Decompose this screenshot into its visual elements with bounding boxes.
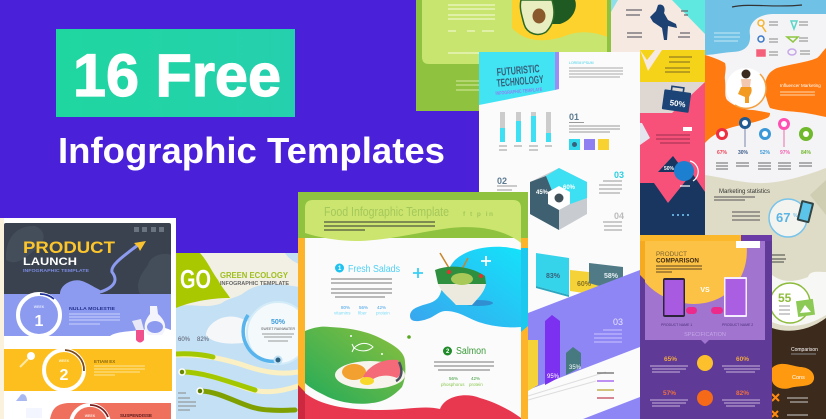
icon: salad bowl	[435, 253, 493, 306]
chart: 67% donut: %	[793, 213, 798, 219]
chart: 50% gauge	[243, 302, 309, 364]
chart: bars	[499, 112, 552, 150]
chart: isometric arrows: 35%	[569, 365, 582, 371]
panel: avocado template	[416, 0, 612, 111]
social stat pins: 84%	[801, 150, 812, 156]
navy base	[640, 173, 705, 235]
panel: product comparison template: SPECIFICATION	[684, 332, 726, 338]
heading: FUTURISTIC	[496, 63, 540, 79]
week 2 band: ETIAM EX	[94, 359, 115, 364]
title badge	[56, 29, 295, 117]
icon: flask	[145, 306, 165, 335]
header: LAUNCH	[23, 256, 77, 268]
chart: 55 donut: 55	[778, 291, 792, 305]
step 01: 01	[569, 112, 579, 122]
heading: GO	[180, 264, 211, 294]
heading	[493, 63, 545, 97]
title badge: 16 Free	[73, 42, 281, 109]
panel: futuristic technology template	[479, 52, 640, 419]
social stat pins: 67%	[717, 150, 728, 156]
section: salmon	[434, 346, 494, 387]
heading: Food Infographic Template	[324, 205, 449, 219]
icon: fish	[352, 343, 373, 352]
chart: isometric arrows: 95%	[547, 374, 560, 380]
week 1 band: 1	[35, 313, 44, 330]
subtitle: Infographic Templates	[58, 130, 445, 171]
chart: isometric boxes	[536, 253, 623, 297]
icon: vs: VS	[700, 287, 710, 294]
icon: phone left	[663, 278, 685, 317]
week 2 band: WEEK	[59, 359, 70, 363]
social stat pins: 52%	[760, 150, 771, 156]
social stat pins: 30%	[738, 150, 749, 156]
week 1 band	[4, 294, 171, 345]
section: fresh salads: 56%	[359, 305, 368, 310]
panel: product comparison template	[640, 235, 772, 419]
icon: salmon plate	[335, 360, 405, 389]
section: fresh salads: vitamins	[334, 310, 351, 316]
panel: futuristic technology template: LOREM IPSUM	[569, 61, 594, 65]
social stat pins	[716, 117, 813, 169]
chart: 67% donut	[769, 199, 814, 237]
week 3 band	[16, 394, 171, 419]
panel: green ecology template	[176, 253, 309, 419]
section: fresh salads: Fresh Salads	[348, 263, 400, 275]
icon: globe	[658, 156, 698, 186]
week 1 band: NULLA MOLESTIE	[69, 306, 115, 311]
panel: food infographic template	[298, 192, 528, 419]
panel: green ecology template: 60%	[178, 337, 191, 343]
heading: COMPARISON	[656, 258, 699, 264]
week 3 band: WEEK	[85, 414, 96, 418]
chart: wave lines	[176, 354, 298, 410]
panel: futuristic technology template: 03	[613, 317, 623, 327]
social stat pins: 97%	[780, 150, 791, 156]
section: salmon: 42%	[471, 376, 480, 381]
blue blob	[410, 247, 521, 327]
panel: green ecology template: 82%	[197, 337, 210, 343]
heading: TECHNOLOGY	[496, 74, 544, 90]
icon: woman in yoga pose	[726, 68, 766, 108]
section: salmon: 56%	[449, 376, 458, 381]
icon: magnifier	[27, 352, 35, 360]
spec stats: 57%	[663, 390, 676, 397]
heading: INFOGRAPHIC TEMPLATE	[495, 87, 543, 97]
heading	[180, 264, 289, 294]
panel: right column lower (stats and brown): Comparison	[791, 347, 818, 353]
panel: business template	[611, 0, 705, 235]
panel: product comparison template: PRODUCT NAME 1	[661, 323, 692, 327]
icon: seated businessman silhouette	[650, 5, 677, 40]
section: fresh salads: 1	[338, 266, 342, 272]
icon: avocado	[520, 0, 576, 34]
icon: laptop	[640, 123, 650, 145]
week 1 band: WEEK	[34, 305, 45, 309]
panel: product comparison template: PRODUCT NAME 2	[722, 323, 753, 327]
section: fresh salads	[331, 263, 400, 316]
chart: isometric boxes: 83%	[546, 273, 561, 280]
chart: hexagon: 45%	[536, 190, 549, 196]
chart: hexagon	[530, 168, 587, 230]
heading: PRODUCT	[656, 251, 687, 258]
icon: cons blob	[772, 364, 814, 389]
section: salmon: 2	[446, 349, 450, 355]
header: PRODUCT	[23, 239, 115, 257]
section: fresh salads: 80%	[341, 305, 350, 310]
panel: futuristic technology template: 03	[614, 170, 624, 180]
chart: 50% gauge: 50%	[271, 319, 286, 326]
panel: futuristic technology template: 02	[497, 176, 507, 186]
spec stats	[650, 355, 760, 406]
chart: isometric boxes: 60%	[577, 281, 592, 288]
section: salmon: phosphorus	[441, 382, 465, 387]
icon: plus signs	[481, 256, 491, 266]
heading: INFOGRAPHIC TEMPLATE	[220, 281, 289, 287]
chart: 55 donut	[770, 283, 815, 323]
section: salmon: Salmon	[456, 346, 486, 357]
icon: briefcase 50%	[662, 85, 692, 113]
social icons: f t p in	[463, 211, 493, 218]
icon: paper plane	[134, 241, 146, 251]
chart: 67% donut: 67	[776, 210, 790, 225]
icon: phone right	[724, 277, 747, 317]
chart: isometric arrows	[528, 315, 582, 391]
chart: 50% gauge: SWEET RAINWATER	[261, 327, 295, 331]
chart: hexagon: 60%	[563, 185, 576, 191]
icon: briefcase 50%: 50%	[669, 98, 686, 109]
chart: isometric boxes: 58%	[604, 273, 619, 280]
week 3 band: SUSPENDISSE	[120, 413, 152, 418]
section: fresh salads: 42%	[377, 305, 386, 310]
section: salmon: protein	[469, 382, 483, 387]
icon: orange crosses	[772, 394, 779, 417]
header	[4, 223, 171, 294]
panel: influencer template: Influencer Marketing	[780, 83, 821, 88]
heading	[656, 251, 699, 264]
icon row: top feature icons	[757, 20, 798, 56]
section: fresh salads: protein	[376, 310, 390, 316]
red wave	[305, 393, 521, 419]
section: fresh salads: fiber	[358, 310, 367, 316]
spec stats: 82%	[736, 390, 749, 397]
step 01	[569, 112, 620, 150]
panel: influencer template	[705, 0, 826, 419]
icon: globe: 50%	[664, 166, 675, 172]
panel: futuristic technology template: 04	[614, 211, 624, 221]
green blob	[305, 327, 405, 404]
spec stats: 60%	[736, 356, 749, 363]
panel: influencer template: Marketing statistics	[719, 189, 770, 195]
panel: right column lower (stats and brown)	[769, 199, 826, 419]
icon: cons blob: Cons	[792, 375, 805, 381]
panel: product launch template	[0, 218, 176, 419]
header: INFOGRAPHIC TEMPLATE	[23, 268, 89, 273]
spec stats: 65%	[664, 356, 677, 363]
week 2 band	[4, 349, 172, 391]
heading: GREEN ECOLOGY	[220, 271, 289, 280]
week 2 band: 2	[60, 367, 69, 384]
